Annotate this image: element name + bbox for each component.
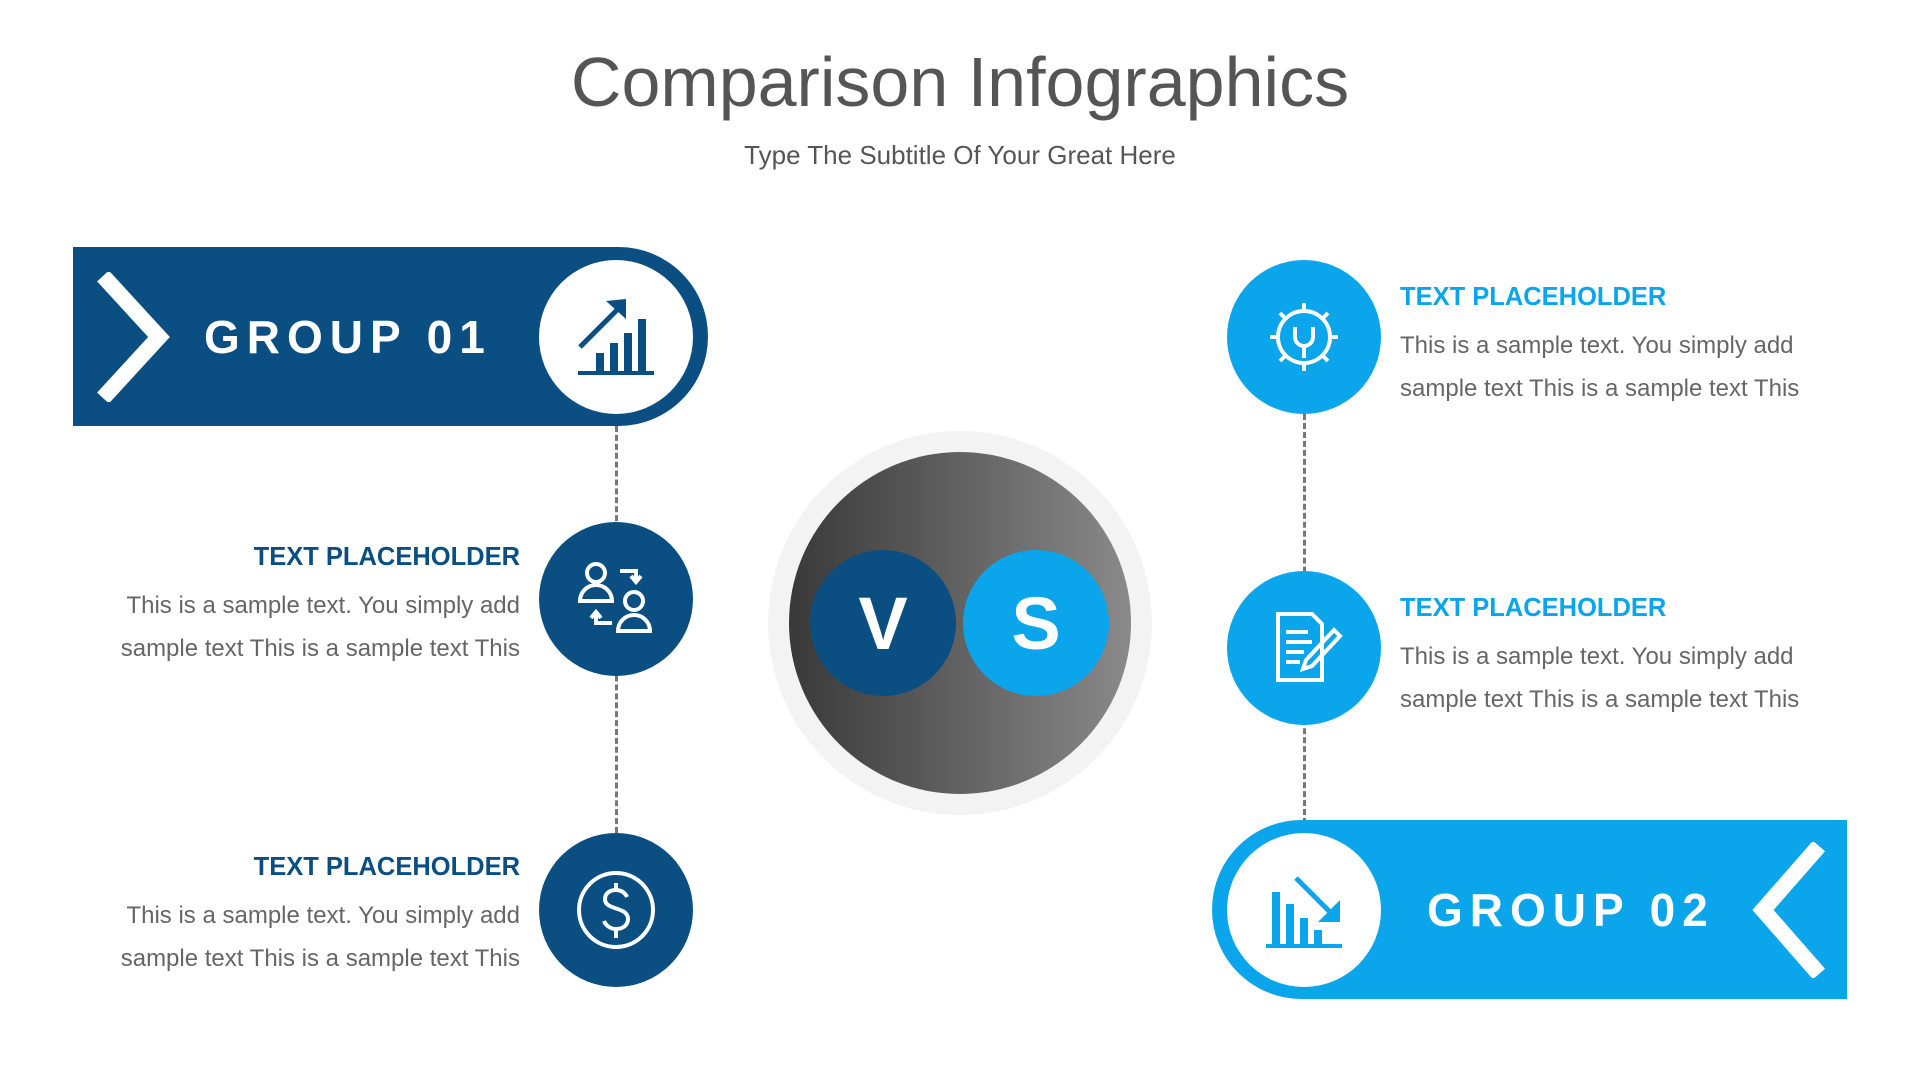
vs badge: [768, 431, 1152, 815]
item: right 2: [1400, 594, 1799, 713]
S circle: [963, 550, 1109, 696]
icon: gear wrench: [1227, 260, 1381, 414]
item: left 2: [121, 853, 520, 972]
item: left 2: sample text This is a sample text This: [121, 945, 520, 972]
chevron icon: [97, 272, 170, 402]
item: left 1: This is a sample text. You simply add: [126, 592, 520, 619]
item: left 1: sample text This is a sample text This: [121, 635, 520, 662]
icon: growth chart: [539, 260, 693, 414]
item: right 2: This is a sample text. You simply add: [1400, 643, 1794, 670]
item: right 1: sample text This is a sample text This: [1400, 375, 1799, 402]
item: right 1: This is a sample text. You simply add: [1400, 332, 1794, 359]
icon: decline chart: [1227, 833, 1381, 987]
item: left 2: TEXT PLACEHOLDER: [254, 853, 520, 881]
item: left 1: [121, 543, 520, 662]
banner: group 01: [73, 247, 708, 426]
group 02 label: GROUP 02: [1427, 884, 1715, 936]
S circle: S: [1011, 582, 1061, 664]
item: right 2: sample text This is a sample text This: [1400, 686, 1799, 713]
item: right 1: [1400, 283, 1799, 402]
title: Comparison Infographics: [571, 43, 1349, 121]
icon: document pen: [1227, 571, 1381, 725]
chevron icon: [1752, 842, 1825, 978]
dashed connector right: [1303, 414, 1306, 824]
V circle: [810, 550, 956, 696]
item: left 1: TEXT PLACEHOLDER: [254, 543, 520, 571]
icon: dollar: [539, 833, 693, 987]
dashed connector left: [615, 426, 618, 833]
group 01 label: GROUP 01: [204, 311, 492, 363]
banner: group 02: [1212, 820, 1847, 999]
icon: people exchange: [539, 522, 693, 676]
item: right 1: TEXT PLACEHOLDER: [1400, 283, 1666, 311]
V circle: V: [858, 582, 908, 664]
subtitle: Type The Subtitle Of Your Great Here: [744, 140, 1176, 170]
item: right 2: TEXT PLACEHOLDER: [1400, 594, 1666, 622]
item: left 2: This is a sample text. You simply add: [126, 902, 520, 929]
